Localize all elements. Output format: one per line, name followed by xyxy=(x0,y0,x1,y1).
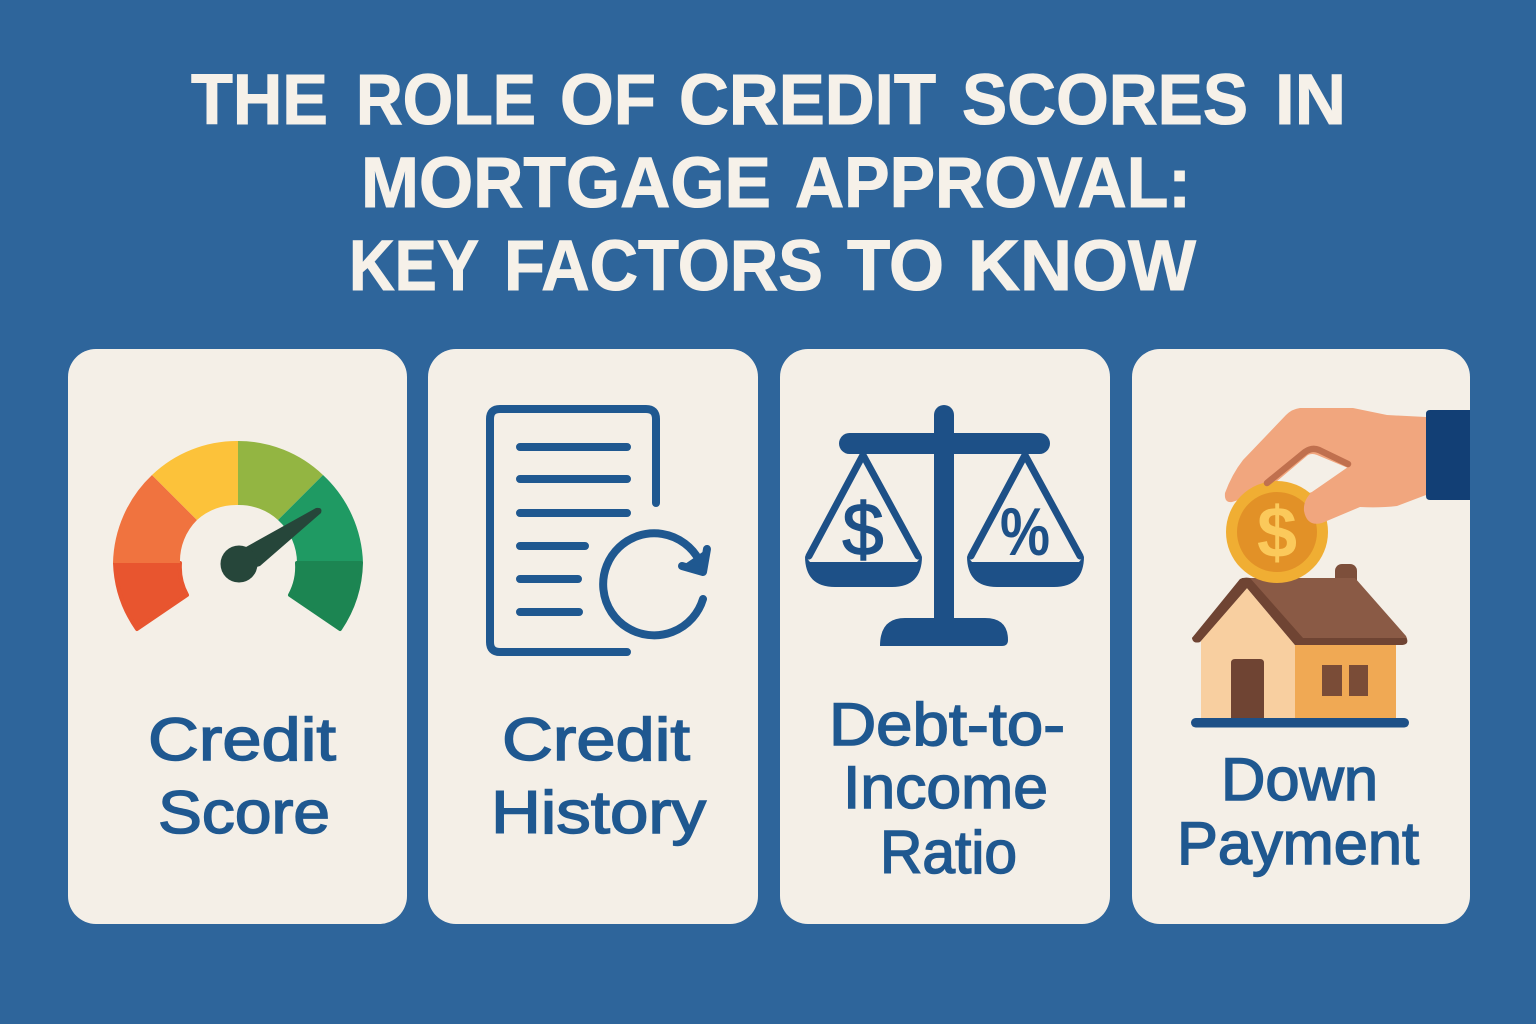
label: down payment xyxy=(1177,746,1419,877)
title: ROLE xyxy=(356,61,536,140)
panel: credit history xyxy=(428,349,758,924)
house door xyxy=(1231,659,1264,718)
hand xyxy=(1225,408,1426,505)
sleeve cuff xyxy=(1426,410,1470,500)
icon: balance scale xyxy=(805,405,1084,646)
title: SCORES xyxy=(962,61,1248,140)
title: THE xyxy=(191,61,328,140)
icon: credit report with refresh arrow xyxy=(490,409,707,652)
title: MORTGAGE xyxy=(361,144,771,223)
label: debt-to-income ratio: Debt-to- xyxy=(829,691,1065,758)
gap between fingers xyxy=(1270,454,1348,500)
label: debt-to-income ratio: Income xyxy=(843,754,1048,821)
card background xyxy=(68,349,407,924)
house windows xyxy=(1322,665,1368,696)
label: down payment: Payment xyxy=(1177,810,1419,877)
coin xyxy=(1226,481,1328,583)
label: credit history: History xyxy=(491,779,706,846)
icon: hand dropping coin into house xyxy=(1191,408,1470,728)
title: KNOW xyxy=(968,227,1196,306)
title: TO xyxy=(847,227,944,306)
title: IN xyxy=(1275,61,1346,140)
house chimney xyxy=(1335,564,1357,588)
icon: credit score gauge xyxy=(113,441,363,629)
panel: debt-to-income ratio xyxy=(780,349,1110,924)
ground line xyxy=(1191,718,1409,728)
label: debt-to-income ratio: Ratio xyxy=(880,819,1017,886)
label: credit history xyxy=(491,706,706,846)
card background xyxy=(428,349,758,924)
label: credit score xyxy=(148,706,336,846)
house roof xyxy=(1192,578,1407,645)
house left wall xyxy=(1201,588,1295,718)
card background xyxy=(780,349,1110,924)
label: down payment: Down xyxy=(1221,746,1378,813)
title: APPROVAL: xyxy=(795,144,1191,223)
roof shaded edges xyxy=(1192,578,1407,645)
title xyxy=(191,61,1346,306)
label: credit score: Credit xyxy=(148,706,336,773)
title: OF xyxy=(560,61,656,140)
title: CREDIT xyxy=(679,61,936,140)
coin: $ xyxy=(1257,493,1297,573)
label: credit score: Score xyxy=(158,779,330,846)
title: FACTORS xyxy=(504,227,823,306)
icon: balance scale: $ xyxy=(842,488,884,571)
panel: credit score xyxy=(68,349,407,924)
house right wall xyxy=(1295,645,1396,718)
thumb xyxy=(1304,440,1426,524)
finger crease xyxy=(1267,449,1348,483)
label: debt-to-income ratio xyxy=(829,691,1065,886)
title: KEY xyxy=(349,227,479,306)
icon: balance scale: % xyxy=(1000,494,1050,570)
label: credit history: Credit xyxy=(502,706,690,773)
card background xyxy=(1132,349,1470,924)
panel: down payment xyxy=(1132,349,1470,924)
